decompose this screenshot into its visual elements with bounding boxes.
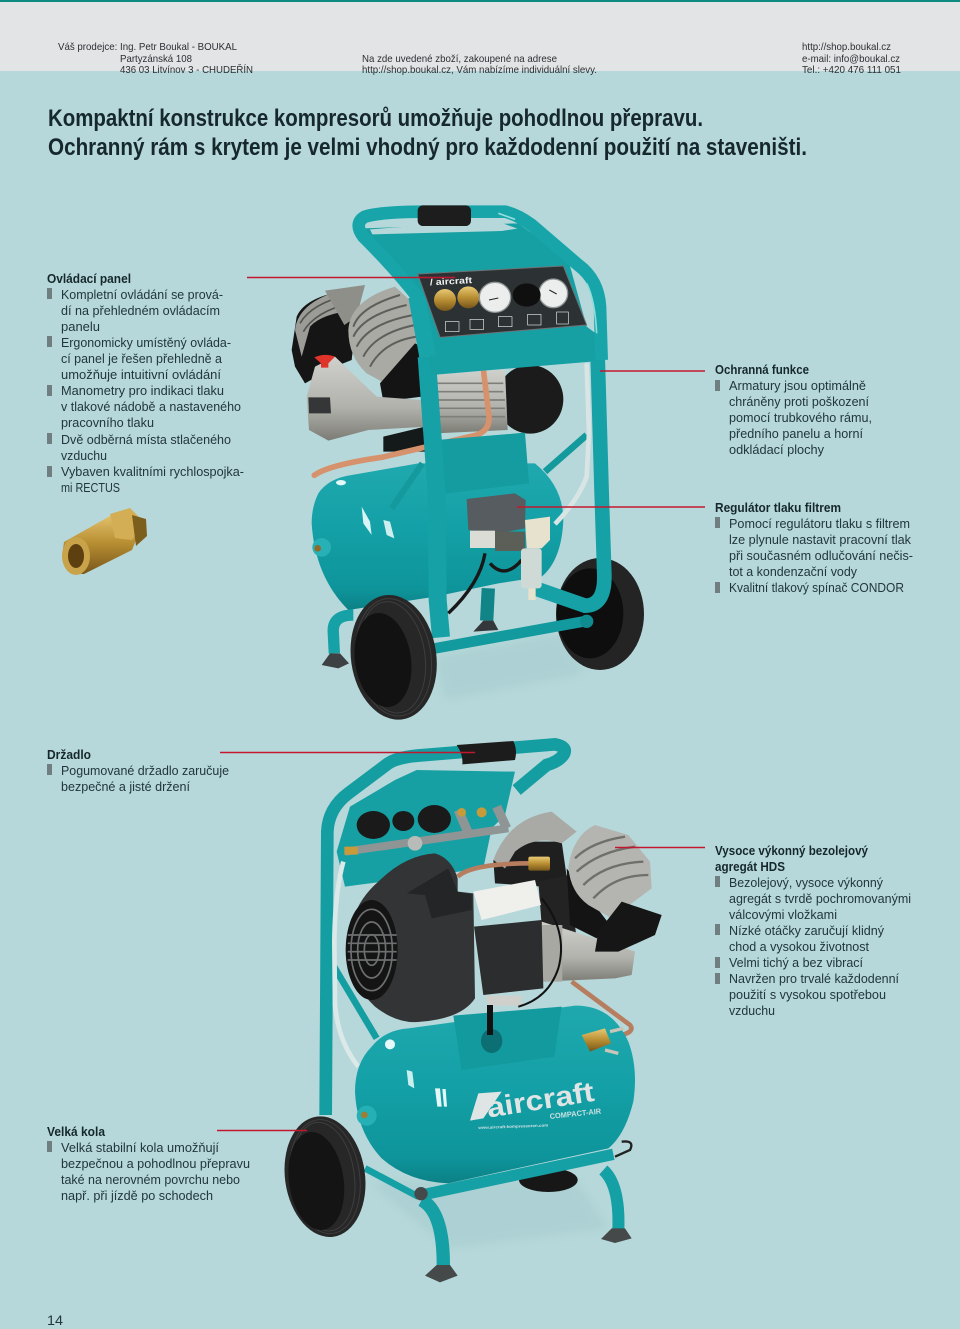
callout: Vysoce výkonný agregát: Bezolejový, vysoce výkonný [729, 875, 883, 890]
tank logo: www.aircraft-kompressoren.com [477, 1123, 549, 1130]
brass fitting on pipe [528, 857, 550, 871]
rear wheel [556, 558, 644, 670]
callout: Držadlo [47, 747, 229, 794]
callout: Ochranná funkce: chráněny proti poškození [729, 394, 869, 409]
callout: Vysoce výkonný agregát: použití s vysokou spotřebou [729, 987, 886, 1002]
dealer note: http://shop.boukal.cz, Vám nabízíme individuální slevy. [362, 64, 597, 76]
brass outlets [434, 286, 479, 311]
callout: Regulátor tlaku filtrem: Regulátor tlaku filtrem [715, 500, 841, 515]
callout: Regulátor tlaku filtrem: Kvalitní tlakový spínač CONDOR [729, 580, 904, 595]
compressor photo: upright with control panel [292, 205, 644, 725]
callout: Ovládací panel: Ovládací panel [47, 271, 131, 286]
floor shadow [368, 1178, 608, 1248]
callout: Velká kola: Velká stabilní kola umožňují [61, 1140, 219, 1155]
callout: Ovládací panel: cí panel je řešen přehledně a [61, 351, 223, 366]
dealer web and phone: Tel.: +420 476 111 051 [802, 64, 901, 76]
callout: Držadlo: Držadlo [47, 747, 91, 762]
callout: Ochranná funkce: Armatury jsou optimálně [729, 378, 866, 393]
capacitor [473, 880, 541, 920]
dealer contact: 436 03 Litvínov 3 - CHUDEŘÍN [120, 63, 253, 76]
power cable [448, 553, 522, 613]
rear sheet panel [337, 770, 515, 887]
callout: Ovládací panel: Kompletní ovládání se prová- [61, 287, 223, 302]
cable glands [485, 996, 522, 1006]
callout: Ovládací panel: Dvě odběrná místa stlačeného [61, 432, 231, 447]
callout: Vysoce výkonný agregát: agregát s tvrdě pochromovanými [729, 891, 911, 906]
cables [490, 898, 561, 1035]
callout: Ochranná funkce: Ochranná funkce [715, 362, 809, 377]
callout: Držadlo: Pogumované držadlo zaručuje [61, 763, 229, 778]
terminal box [474, 920, 543, 995]
frame and handle [359, 212, 604, 648]
callout: Ovládací panel [47, 271, 244, 495]
control panel [418, 266, 587, 337]
leader lines [217, 278, 705, 1130]
title: Kompaktní konstrukce kompresorů umožňuje pohodlnou přepravu. [48, 105, 703, 132]
callout: Ochranná funkce: předního panelu a horní [729, 426, 863, 441]
callout: Vysoce výkonný agregát: Vysoce výkonný bezolejový [715, 843, 869, 858]
rear wheel [519, 1168, 578, 1192]
pump head and fins [292, 285, 428, 452]
title [48, 105, 807, 161]
air tank [312, 463, 563, 610]
callout: Ovládací panel: dí na přehledném ovládacím [61, 303, 220, 318]
title: Ochranný rám s krytem je velmi vhodný pro každodenní použití na staveništi. [48, 134, 807, 161]
motor end fins [542, 925, 562, 982]
quick coupling RECTUS photo [62, 508, 147, 575]
callout: Velká kola: např. při jízdě po schodech [61, 1188, 213, 1203]
rubber feet [414, 1187, 632, 1282]
dealer note [362, 53, 597, 76]
callout: Velká kola: Velká kola [47, 1124, 106, 1139]
callout: Vysoce výkonný agregát [715, 843, 911, 1018]
frame braces [392, 435, 587, 508]
gauges [479, 279, 568, 312]
callout: Regulátor tlaku filtrem: tot a kondenzační vody [729, 564, 857, 579]
copper pipe [314, 372, 489, 475]
handle grip [457, 741, 516, 764]
front wheel [343, 589, 445, 725]
gauge manifold [344, 805, 508, 855]
frame tube and handle [326, 744, 565, 1115]
control panel: / aircraft [430, 275, 472, 287]
callout: Regulátor tlaku filtrem: lze plynule nastavit pracovní tlak [729, 532, 911, 547]
page number: 14 [47, 1312, 63, 1328]
front foot leg [322, 615, 353, 668]
callout: Vysoce výkonný agregát: vzduchu [729, 1003, 775, 1018]
callout: Ochranná funkce [715, 362, 872, 457]
dealer web and phone: e-mail: info@boukal.cz [802, 53, 900, 65]
pump heads with fins [493, 812, 662, 982]
callout: Držadlo: bezpečné a jisté držení [61, 779, 190, 794]
tank logo [470, 1076, 602, 1130]
air tank [355, 1006, 635, 1183]
callout: Vysoce výkonný agregát: Velmi tichý a bez vibrací [729, 955, 863, 970]
callout: Ochranná funkce: odkládací plochy [729, 442, 824, 457]
pressure switch and filter [467, 493, 550, 600]
callout: Ovládací panel: vzduchu [61, 448, 107, 463]
callout: Ovládací panel: umožňuje intuitivní ovládání [61, 367, 221, 382]
motor [435, 365, 563, 434]
callout: Regulátor tlaku filtrem [715, 500, 913, 595]
header band [0, 0, 960, 71]
callout: Regulátor tlaku filtrem: při současném odlučování nečis- [729, 548, 913, 563]
callout: Velká kola: také na nerovném povrchu nebo [61, 1172, 240, 1187]
callout: Regulátor tlaku filtrem: Pomocí regulátoru tlaku s filtrem [729, 516, 910, 531]
compressor photo: side view with motor and tank [277, 741, 662, 1282]
callout: Vysoce výkonný agregát: Nízké otáčky zaručují klidný [729, 923, 884, 938]
callout: Vysoce výkonný agregát: válcovými vložkami [729, 907, 837, 922]
floor shadow [435, 633, 585, 700]
tank outlet fitting [582, 1028, 623, 1053]
front wheel [277, 1111, 373, 1242]
dealer contact: Váš prodejce: Ing. Petr Boukal - BOUKAL [58, 41, 237, 53]
dealer contact [58, 41, 253, 76]
callout: Ovládací panel: panelu [61, 319, 100, 334]
air hose [555, 363, 589, 524]
rear leg [473, 588, 498, 632]
tank logo: aircraft [484, 1076, 596, 1124]
copper pipes [458, 863, 631, 1035]
callout: Ovládací panel: v tlakové nádobě a nastaveného [61, 399, 241, 414]
dealer web and phone [802, 41, 901, 76]
symbol labels [445, 312, 568, 332]
callout: Vysoce výkonný agregát: chod a vysokou životnost [729, 939, 869, 954]
callout: Ochranná funkce: pomocí trubkového rámu, [729, 410, 872, 425]
handle grip [418, 205, 471, 226]
mounting plate [437, 433, 529, 494]
callout: Vysoce výkonný agregát: Navržen pro trvalé každodenní [729, 971, 899, 986]
callout: Ovládací panel: Manometry pro indikaci tlaku [61, 383, 224, 398]
motor housing [346, 853, 475, 1022]
callout: Vysoce výkonný agregát: agregát HDS [715, 859, 785, 874]
motor mount [453, 1007, 562, 1070]
stand [365, 1141, 631, 1265]
callout: Velká kola [47, 1124, 250, 1203]
dealer contact: Partyzánská 108 [120, 53, 192, 65]
callout: Ovládací panel: Ergonomicky umístěný ovláda- [61, 335, 231, 350]
callout: Ovládací panel: pracovního tlaku [61, 415, 154, 430]
callout: Ovládací panel: mi RECTUS [61, 480, 120, 495]
callout: Ovládací panel: Vybaven kvalitními rychlospojka- [61, 464, 244, 479]
tank logo: COMPACT-AIR [549, 1107, 602, 1121]
dealer note: Na zde uvedené zboží, zakoupené na adrese [362, 53, 557, 65]
regulator knob [513, 283, 541, 307]
dealer web and phone: http://shop.boukal.cz [802, 41, 891, 53]
callout: Velká kola: bezpečnou a pohodlnou přepravu [61, 1156, 250, 1171]
air hose [334, 862, 358, 1067]
